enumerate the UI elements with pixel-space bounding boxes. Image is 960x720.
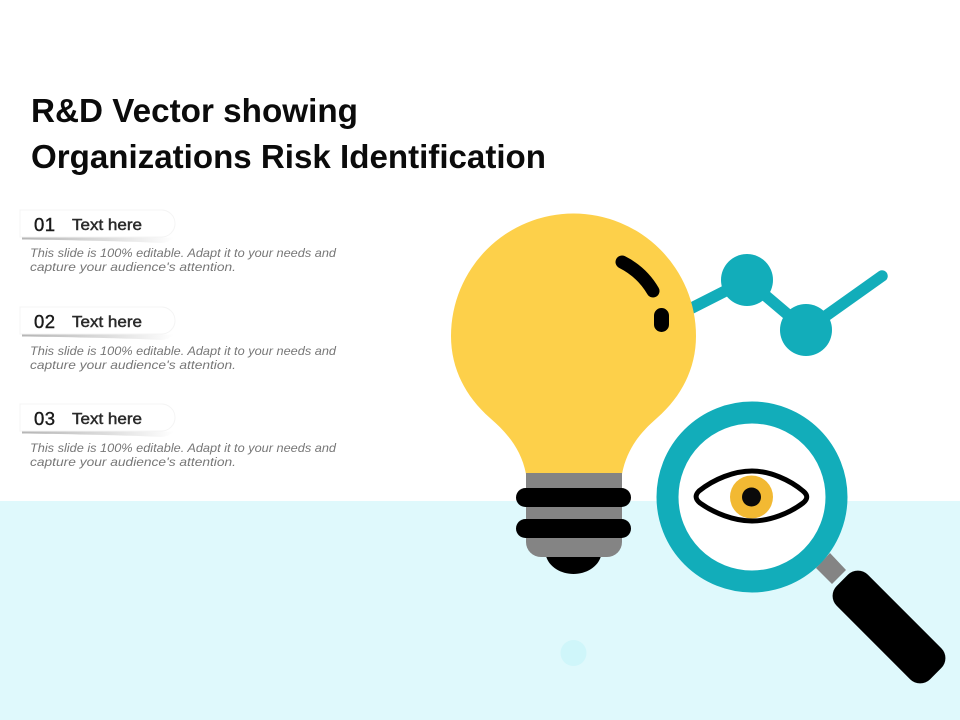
description 02	[30, 345, 337, 372]
lens ring	[668, 412, 836, 582]
base bands	[516, 488, 631, 538]
pill 01	[20, 210, 175, 237]
description 01: capture your audience's attention.	[30, 261, 236, 274]
title	[31, 92, 546, 175]
pill 03	[20, 404, 175, 431]
description 03	[30, 442, 337, 469]
list item 01	[20, 210, 337, 274]
eye	[696, 471, 807, 521]
description 01	[30, 247, 337, 274]
number 03: 03	[34, 408, 55, 429]
decorative floor dot	[560, 640, 586, 666]
bulb base	[526, 473, 622, 557]
heading 02: Text here	[72, 314, 142, 331]
pill 02	[20, 307, 175, 334]
pill shadow 01	[22, 238, 174, 243]
icon: light bulb	[451, 213, 696, 574]
icon: line chart	[680, 254, 882, 356]
number 01: 01	[34, 214, 55, 235]
heading 03: Text here	[72, 411, 142, 428]
handle grip	[827, 565, 951, 689]
handle connector	[816, 553, 846, 584]
title: Organizations Risk Identification	[31, 138, 546, 175]
list item 02	[20, 307, 337, 372]
title: R&D Vector showing	[31, 92, 358, 129]
bulb highlight	[622, 262, 669, 332]
description 02: capture your audience's attention.	[30, 359, 236, 372]
description 01: This slide is 100% editable. Adapt it to your needs and	[30, 247, 337, 260]
pill shadow 02	[22, 334, 174, 340]
description 03: This slide is 100% editable. Adapt it to your needs and	[30, 442, 337, 455]
description 03: capture your audience's attention.	[30, 456, 236, 469]
description 02: This slide is 100% editable. Adapt it to your needs and	[30, 345, 337, 358]
background band	[0, 501, 960, 720]
bulb tip	[546, 556, 601, 574]
list item 03	[20, 404, 337, 469]
icon: magnifying glass with eye	[668, 412, 951, 689]
number 02: 02	[34, 311, 55, 332]
heading 01: Text here	[72, 217, 142, 234]
pill shadow 03	[22, 432, 174, 437]
bulb glass	[451, 213, 696, 474]
